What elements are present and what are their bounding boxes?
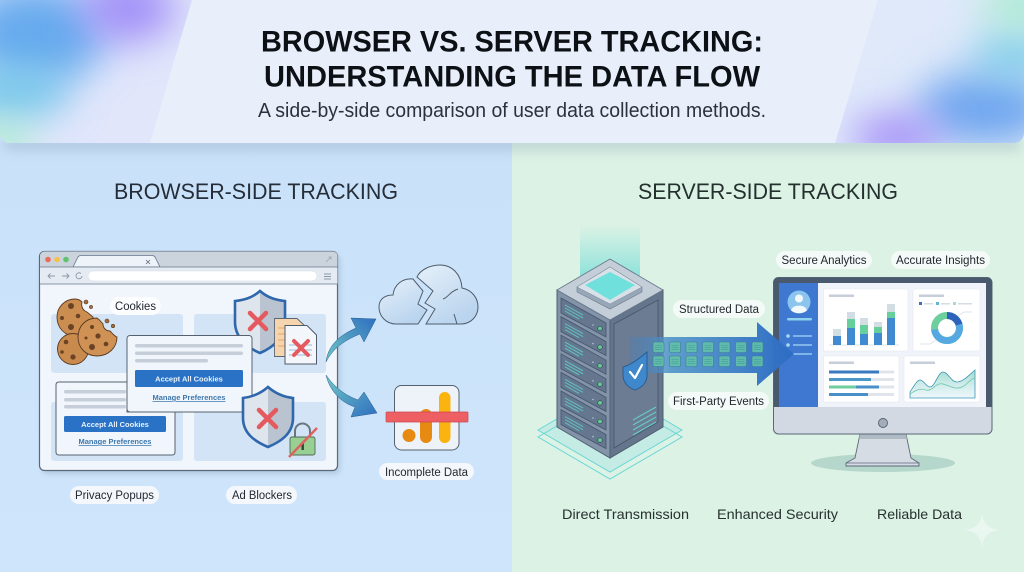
popup: rear cookie dialog: Manage Preferences — [79, 437, 151, 446]
icon: security shield with check — [623, 352, 647, 390]
title: BROWSER VS. SERVER TRACKING: — [261, 26, 763, 58]
title: UNDERSTANDING THE DATA FLOW — [264, 60, 761, 94]
label: accurate insights: Accurate Insights — [896, 255, 985, 267]
dashboard donut card — [913, 289, 980, 351]
label: incomplete data: Incomplete Data — [385, 467, 469, 479]
popup: front cookie dialog: Accept All Cookies — [155, 374, 223, 384]
icon: analytics with red bar — [386, 386, 468, 450]
arrow: to broken cloud — [326, 318, 376, 362]
panel: browser-side background — [0, 130, 512, 572]
icon: shield with cross — [235, 291, 285, 353]
popup: front cookie dialog — [127, 336, 252, 412]
light beam — [580, 225, 640, 285]
icon: second shield with cross — [243, 387, 293, 447]
arrow: data flow to dashboard — [630, 322, 794, 386]
icon: server rack — [538, 225, 682, 479]
label: first-party events: First-Party Events — [673, 396, 764, 408]
glowing top plate — [577, 267, 642, 309]
label: cookies: Cookies — [115, 301, 156, 313]
caption: direct transmission: Direct Transmission — [562, 506, 689, 522]
arrow: to analytics icon — [326, 375, 377, 417]
icon: sparkle — [964, 513, 1000, 548]
icon: monitor dashboard — [774, 278, 992, 472]
label: structured data — [673, 300, 765, 318]
icon: cookies — [57, 299, 117, 364]
label: privacy popups — [70, 486, 159, 504]
server blades — [561, 298, 606, 449]
label: cookies — [110, 297, 161, 315]
header banner — [0, 0, 1024, 162]
dashboard bar chart card — [824, 289, 908, 351]
label: privacy popups: Privacy Popups — [75, 490, 154, 502]
icon: blocked documents — [274, 318, 316, 364]
icon: crossed padlock — [289, 424, 317, 457]
caption: enhanced security: Enhanced Security — [717, 506, 838, 522]
label: structured data: Structured Data — [679, 304, 760, 316]
data packets — [653, 342, 763, 366]
dashboard sidebar — [779, 283, 818, 407]
label: ad blockers: Ad Blockers — [232, 490, 292, 502]
rack body — [557, 259, 663, 458]
label: incomplete data — [379, 463, 474, 480]
title — [261, 26, 763, 94]
popup: front cookie dialog: Manage Preferences — [153, 393, 225, 402]
label: secure analytics — [776, 251, 872, 269]
subtitle: A side-by-side comparison of user data collection methods. — [258, 100, 766, 122]
platform outlines — [538, 388, 682, 479]
popup: rear cookie dialog — [56, 382, 175, 455]
panel: server-side background — [512, 130, 1024, 572]
dashboard area chart card — [904, 356, 980, 402]
label: accurate insights — [891, 251, 990, 269]
label: secure analytics: Secure Analytics — [782, 255, 867, 267]
heading: server-side tracking: SERVER-SIDE TRACKING — [638, 179, 898, 204]
label: ad blockers — [226, 486, 297, 504]
icon: broken cloud — [379, 265, 478, 324]
dashboard progress bars card — [824, 356, 899, 402]
label: first-party events — [668, 392, 769, 410]
popup: rear cookie dialog: Accept All Cookies — [81, 420, 149, 429]
browser window — [40, 252, 340, 474]
heading: browser-side tracking: BROWSER-SIDE TRACKING — [114, 179, 398, 204]
caption: reliable data: Reliable Data — [877, 506, 962, 522]
